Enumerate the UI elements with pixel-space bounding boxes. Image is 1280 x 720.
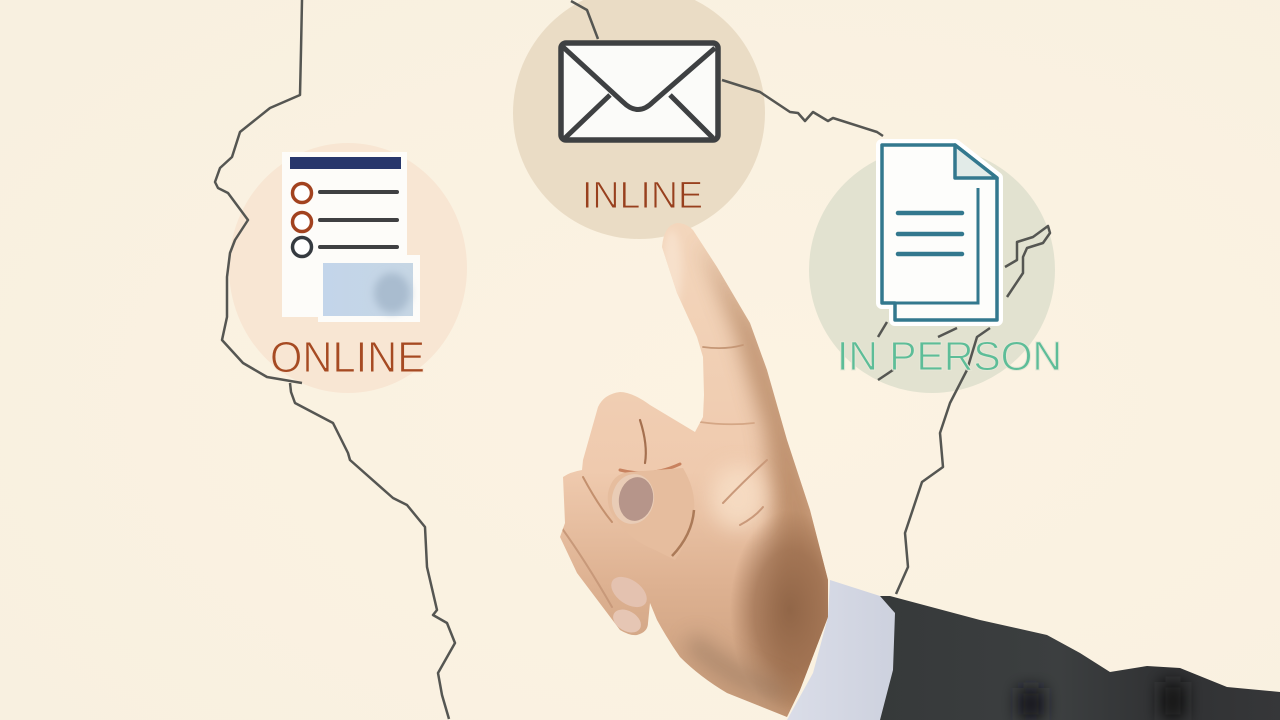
- thumbnail plate: [618, 477, 654, 521]
- icon: online checklist document: [282, 152, 420, 322]
- fingernail two: [613, 610, 641, 632]
- suit sleeve: [870, 596, 1280, 720]
- heading: in person: IN PERSON: [837, 333, 1062, 379]
- panel: online circle: [229, 143, 467, 393]
- checklist item two: [292, 212, 399, 232]
- finger tip shading: [664, 233, 682, 298]
- wrist band shadow: [690, 640, 785, 695]
- hand pointing up: [560, 223, 828, 717]
- icon: paper document: [882, 145, 997, 320]
- panel: in person circle: [809, 147, 1055, 393]
- thumbnail: [612, 474, 654, 524]
- skin base: [555, 220, 835, 720]
- fingernail one: [611, 577, 647, 607]
- heading: inline: INLINE: [582, 175, 703, 217]
- panel: inline circle: [513, 0, 765, 239]
- checklist item one: [292, 184, 399, 202]
- map outline top and right: [571, 1, 1050, 594]
- photo card: [318, 255, 420, 322]
- creases: [561, 345, 767, 607]
- thumb: [608, 468, 694, 560]
- lower palm shadow: [734, 522, 828, 695]
- palm highlight: [710, 466, 766, 530]
- shirt cuff: [787, 580, 895, 720]
- map outline left: [215, 0, 455, 719]
- heading: online: ONLINE: [270, 333, 425, 382]
- icon: envelope: [561, 43, 718, 140]
- right edge shading: [700, 240, 835, 718]
- checklist item three: [292, 238, 399, 256]
